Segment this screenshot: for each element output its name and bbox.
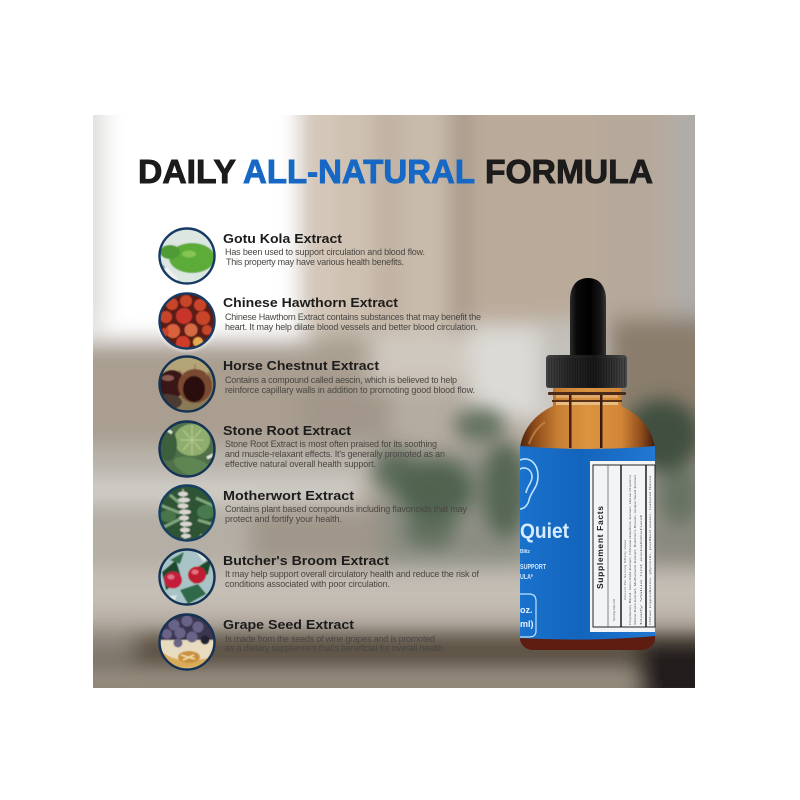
title bbox=[138, 153, 653, 190]
text: Chinese Hawthorn: Chinese Hawthorn Extract bbox=[223, 295, 399, 310]
icon: butcher's broom berries bbox=[158, 548, 216, 606]
product name: Quiet bbox=[520, 520, 569, 543]
blue product label bbox=[520, 446, 655, 640]
dropper bulb bbox=[570, 278, 606, 356]
ingredient: Chinese Hawthorn bbox=[155, 290, 481, 354]
supplement facts panel: Serving Size 2ml bbox=[612, 599, 616, 621]
product bottle bbox=[520, 278, 655, 650]
text: Chinese Hawthorn: Chinese Hawthorn Extract contains substances that may benefit the bbox=[225, 312, 481, 322]
text: Gotu Kola: Has been used to support circulation and blood flow. bbox=[225, 247, 425, 257]
ingredient: Motherwort bbox=[158, 484, 467, 542]
label tagline bbox=[520, 549, 546, 581]
bottle base bbox=[520, 636, 655, 650]
ingredient: Horse Chestnut bbox=[158, 355, 474, 413]
text: Grape Seed: Grape Seed Extract bbox=[223, 617, 355, 632]
text: Stone Root bbox=[223, 423, 445, 469]
volume badge bbox=[520, 594, 536, 637]
volume badge: oz. bbox=[520, 605, 532, 615]
text: Horse Chestnut: Contains a compound called aescin, which is believed to help bbox=[225, 375, 457, 385]
text: Motherwort: Motherwort Extract bbox=[223, 488, 355, 503]
supplement facts panel bbox=[590, 461, 655, 632]
text: Chinese Hawthorn: heart. It may help dilate blood vessels and better blood circulation. bbox=[225, 322, 478, 332]
ingredient: Butcher's Broom bbox=[158, 548, 479, 606]
text: Horse Chestnut bbox=[223, 358, 475, 395]
text: Stone Root: Stone Root Extract bbox=[223, 423, 352, 438]
dropper cap bbox=[546, 355, 627, 388]
panel: blurred room background bbox=[93, 115, 695, 688]
ingredient: Gotu Kola bbox=[158, 227, 424, 285]
text: Chinese Hawthorn bbox=[223, 295, 481, 332]
icon: hawthorn berries bbox=[158, 292, 216, 353]
icon: horse chestnut bbox=[158, 355, 216, 413]
text: Stone Root: Stone Root Extract is most often praised for its soothing bbox=[225, 439, 437, 449]
text: Butcher's Broom: It may help support overall circulatory health and reduce the risk of bbox=[225, 569, 479, 579]
text: Stone Root: effective natural overall health support. bbox=[225, 459, 376, 469]
label tagline: SUPPORT bbox=[520, 562, 546, 571]
text: Grape Seed: Is made from the seeds of wine grapes and is promoted bbox=[225, 634, 435, 644]
text: Motherwort bbox=[223, 488, 468, 524]
supplement facts panel: Supplement Facts bbox=[595, 506, 605, 589]
supplement facts panel: Amount Per Serving %Daily Value bbox=[623, 540, 627, 600]
icon: motherwort flower spike bbox=[158, 484, 216, 542]
text: Motherwort: protect and fortify your health. bbox=[225, 514, 342, 524]
soft plant foliage bbox=[373, 399, 700, 548]
volume badge: ml) bbox=[520, 619, 534, 629]
supplement facts panel: Daily Value not established bbox=[639, 513, 643, 625]
supplement facts panel: Other ingredients: glycerin, purified water, natural flavor bbox=[648, 475, 652, 625]
label tagline: Blitz bbox=[520, 549, 530, 555]
text: Grape Seed: as a dietary supplement that's beneficial for overall health bbox=[225, 643, 443, 653]
icon: stone root leaves bbox=[158, 420, 216, 478]
text: Butcher's Broom: Butcher's Broom Extract bbox=[223, 553, 390, 568]
label tagline: ULA* bbox=[520, 572, 533, 581]
text: Stone Root: and muscle-relaxant effects. It's generally promoted as an bbox=[225, 449, 445, 459]
text: Butcher's Broom: conditions associated with poor circulation. bbox=[225, 579, 390, 589]
text: Horse Chestnut: reinforce capillary walls in addition to promoting good blood flow. bbox=[225, 385, 475, 395]
supplement facts panel: Proprietary Blend: Gotu Kola Extract, Chinese Hawthorn Extract, Horse Chestnut bbox=[628, 475, 632, 625]
text: Butcher's Broom bbox=[223, 553, 479, 589]
text: Gotu Kola bbox=[223, 231, 425, 267]
icon: gotu kola leaf bbox=[158, 227, 216, 285]
ingredient: Stone Root bbox=[158, 420, 444, 478]
ingredient: Grape Seed bbox=[158, 613, 442, 671]
title: FORMULA bbox=[485, 153, 653, 190]
text: Motherwort: Contains plant based compounds including flavonoids that may bbox=[225, 504, 468, 514]
icon: grapes and seeds bbox=[158, 613, 216, 671]
supplement facts panel: Stone Root Extract, Motherwort Extract, Butcher's Broom, Grape Seed Extract bbox=[633, 475, 637, 625]
glass shoulder and neck bbox=[520, 388, 654, 449]
title: ALL-NATURAL bbox=[243, 153, 475, 190]
text: Gotu Kola: Gotu Kola Extract bbox=[223, 231, 343, 246]
text: Horse Chestnut: Horse Chestnut Extract bbox=[223, 358, 380, 373]
text: Grape Seed bbox=[223, 617, 443, 653]
text: Gotu Kola: This property may have various health benefits. bbox=[226, 257, 404, 267]
ear logo bbox=[520, 459, 538, 509]
title: DAILY bbox=[138, 153, 236, 190]
